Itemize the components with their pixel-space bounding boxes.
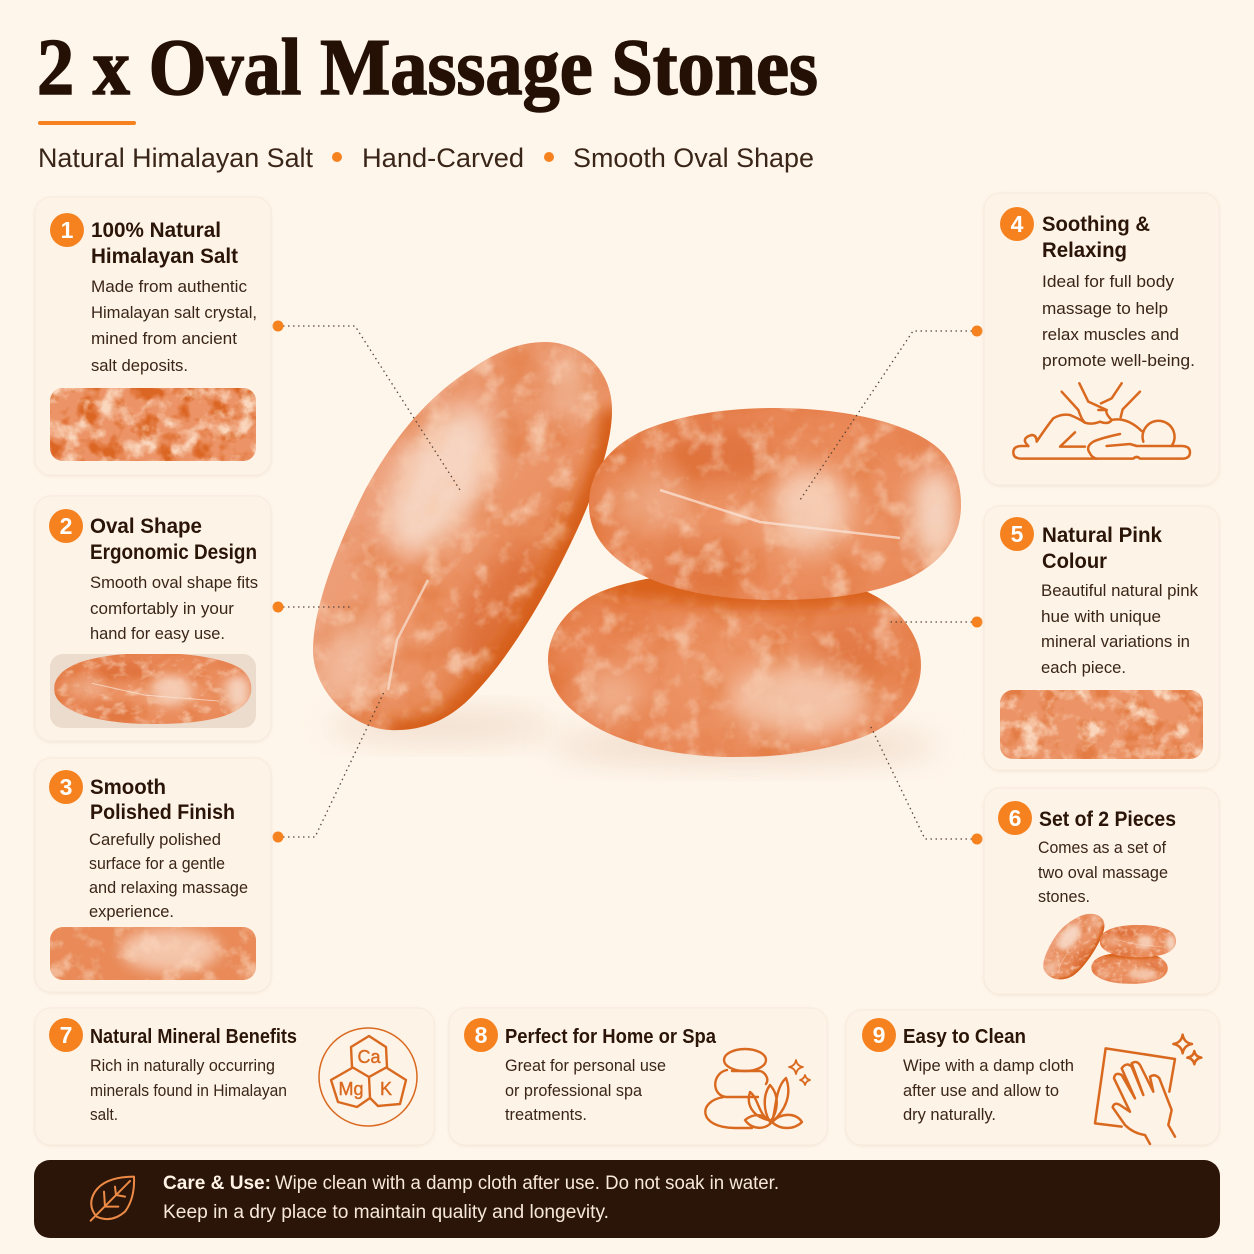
panel 6: set of 2 pieces: stones. [1038, 887, 1090, 906]
panel 4: soothing and relaxing [984, 193, 1219, 486]
panel 4: soothing and relaxing: 4 [1011, 211, 1024, 237]
panel 8: home or spa: treatments. [505, 1105, 587, 1124]
title underline [38, 121, 136, 125]
panel 8: home or spa: Perfect for Home or Spa [505, 1026, 717, 1048]
stone: bottom of stack [540, 565, 930, 765]
panel 9: easy to clean: dry naturally. [903, 1105, 996, 1124]
icon: spa stones and lotus [705, 1049, 810, 1128]
care and use bar [34, 1160, 1220, 1238]
panel 7: mineral benefits: salt. [90, 1105, 118, 1124]
panel 8: home or spa: or professional spa [505, 1081, 643, 1100]
panel 3: polished finish: 3 [60, 774, 72, 800]
panel 4: soothing and relaxing: Soothing & [1042, 212, 1150, 236]
panel 1: natural salt: Himalayan Salt [91, 244, 238, 268]
panel 5: natural pink colour: mineral variations in [1041, 632, 1190, 651]
panel 7: mineral benefits: Rich in naturally occurring [90, 1056, 275, 1075]
panel 2: oval shape: Ergonomic Design [90, 540, 257, 564]
panel 2: oval shape [35, 496, 271, 742]
icon: minerals [319, 1028, 417, 1126]
panel 6: set of 2 pieces: Set of 2 Pieces [1039, 807, 1176, 831]
care and use bar: Care & Use: [163, 1173, 271, 1194]
panel 8: home or spa [449, 1008, 827, 1146]
title: 2 x Oval Massage Stones [37, 24, 818, 112]
panel 4: soothing and relaxing: Relaxing [1042, 238, 1127, 262]
stone shadows [325, 712, 940, 762]
panel 7: mineral benefits: Natural Mineral Benefits [90, 1026, 297, 1048]
stone: top of stack [580, 400, 970, 610]
subtitle: Hand-Carved [362, 143, 524, 173]
panel 9: easy to clean: after use and allow to [903, 1081, 1059, 1100]
panel 1: natural salt: 100% Natural [91, 218, 221, 242]
panel 8: home or spa: 8 [475, 1022, 488, 1048]
icon: minerals: K [380, 1079, 392, 1099]
panel 5: natural pink colour: hue with unique [1041, 607, 1161, 626]
panel 5: natural pink colour: 5 [1011, 521, 1024, 547]
panel 2: oval shape: Oval Shape [90, 514, 202, 538]
icon: massage [1013, 383, 1190, 459]
panel 1: natural salt [35, 197, 271, 476]
panel 4: soothing and relaxing: massage to help [1042, 299, 1168, 318]
panel 5: natural pink colour: Beautiful natural pink [1041, 581, 1198, 600]
panel 5: natural pink colour: Natural Pink [1042, 523, 1162, 547]
subtitle: Natural Himalayan Salt [38, 143, 313, 173]
panel 5: natural pink colour: each piece. [1041, 658, 1126, 677]
connector lines [272, 320, 982, 844]
panel 1: natural salt: Made from authentic [91, 277, 248, 296]
panel 1: natural salt: salt deposits. [91, 356, 188, 375]
icon: minerals: Mg [338, 1079, 364, 1099]
subtitle [38, 143, 814, 173]
panel 6: set of 2 pieces [984, 788, 1219, 995]
panel 9: easy to clean: 9 [873, 1022, 885, 1048]
panel 9: easy to clean: Easy to Clean [903, 1026, 1026, 1048]
panel 4: soothing and relaxing: Ideal for full body [1042, 272, 1175, 291]
panel 3: polished finish: Smooth [90, 775, 166, 799]
panel 3: polished finish: Carefully polished [89, 830, 221, 849]
panel 2: oval shape: Smooth oval shape fits [90, 573, 258, 592]
panel 2: oval shape: hand for easy use. [90, 624, 225, 643]
panel 7: mineral benefits: 7 [60, 1022, 72, 1048]
panel 3: polished finish: experience. [89, 902, 174, 921]
panel 7: mineral benefits [35, 1008, 434, 1146]
panel 3: polished finish [35, 758, 271, 993]
care and use bar: Wipe clean with a damp cloth after use. Do not soak in water. [275, 1173, 779, 1194]
panel 1: natural salt: mined from ancient [91, 329, 237, 348]
care and use bar: Keep in a dry place to maintain quality and longevity. [163, 1202, 609, 1223]
panel 9: easy to clean [846, 1010, 1219, 1146]
mini stones [1040, 912, 1178, 985]
panel 4: soothing and relaxing: relax muscles and [1042, 325, 1179, 344]
icon: leaf [91, 1177, 134, 1221]
panel 3: polished finish: surface for a gentle [89, 854, 225, 873]
panel 4: soothing and relaxing: promote well-being. [1042, 351, 1195, 370]
panel 6: set of 2 pieces: two oval massage [1038, 863, 1168, 882]
panel 5: natural pink colour: Colour [1042, 549, 1108, 573]
panel 2: oval shape: 2 [60, 513, 72, 539]
icon: cloth and hand [1095, 1035, 1201, 1144]
panel 1: natural salt: 1 [61, 217, 74, 243]
panel 3: polished finish: Polished Finish [90, 800, 235, 824]
panel 1: natural salt: Himalayan salt crystal, [91, 303, 257, 322]
stone: leaning left [300, 330, 620, 740]
panel 2: oval shape: comfortably in your [90, 599, 234, 618]
panel 3: polished finish: and relaxing massage [89, 878, 248, 897]
panel 5: natural pink colour [984, 506, 1219, 771]
panel 7: mineral benefits: minerals found in Himalayan [90, 1081, 287, 1100]
icon: minerals: Ca [357, 1047, 381, 1067]
panel 8: home or spa: Great for personal use [505, 1056, 666, 1075]
panel 9: easy to clean: Wipe with a damp cloth [903, 1056, 1074, 1075]
panel 6: set of 2 pieces: Comes as a set of [1038, 838, 1166, 857]
subtitle: Smooth Oval Shape [573, 143, 814, 173]
panel 6: set of 2 pieces: 6 [1009, 805, 1021, 831]
